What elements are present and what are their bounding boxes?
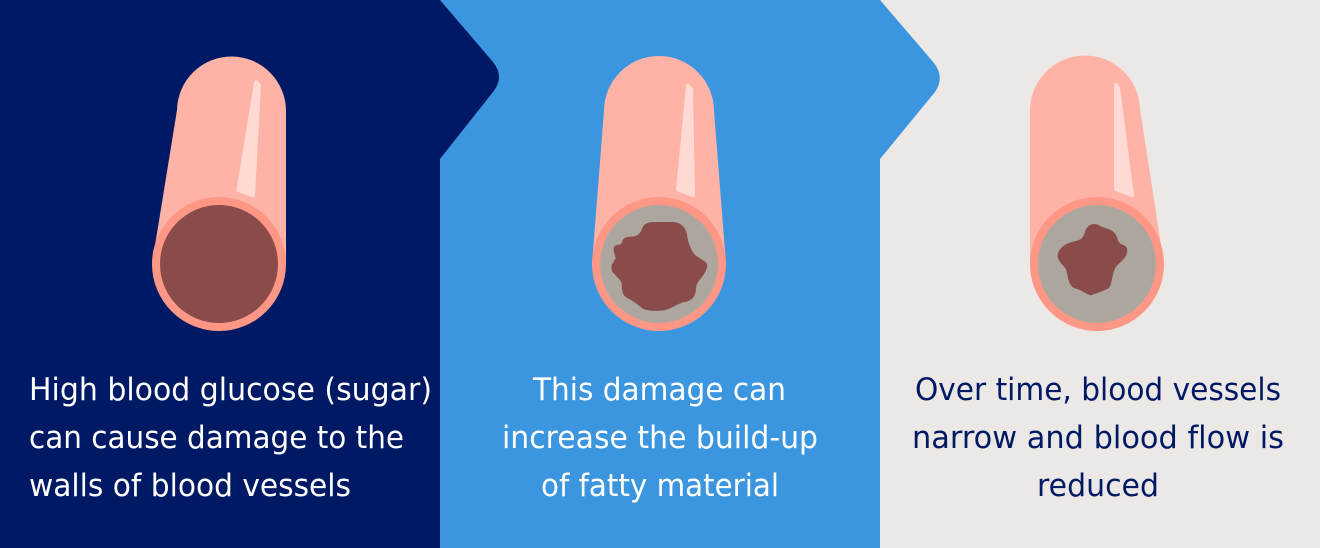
text: second panel caption: of fatty material [541,468,779,504]
text: third panel caption: Over time, blood vessels [915,372,1281,408]
icon: blood vessel with some fatty build-up [592,56,726,331]
text: first panel caption: can cause damage to the [29,420,404,456]
panel: third background [880,0,1320,548]
text: second panel caption: This damage can [532,372,786,408]
text: third panel caption [912,372,1284,504]
icon: healthy blood vessel [152,57,286,331]
text: first panel caption: walls of blood vessels [29,468,351,504]
text: third panel caption: reduced [1037,468,1159,504]
icon: narrowed blood vessel [1030,56,1164,331]
panel: second background with arrow [440,0,940,548]
text: first panel caption [29,372,432,504]
text: second panel caption [502,372,818,504]
text: first panel caption: High blood glucose (sugar) [29,372,432,408]
text: second panel caption: increase the build-up [502,420,818,456]
text: third panel caption: narrow and blood flow is [912,420,1284,456]
panel: first background with arrow [0,0,499,548]
